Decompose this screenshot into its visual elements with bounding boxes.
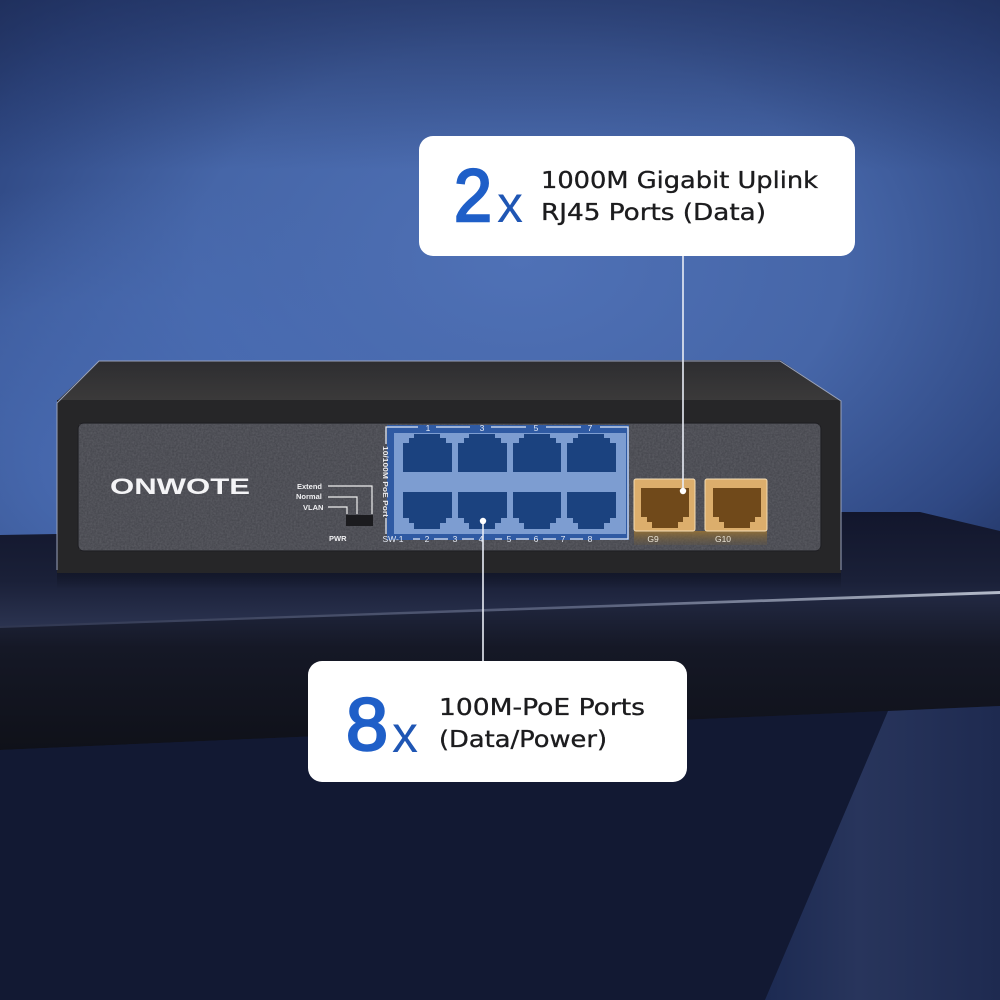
port numbers: 7 [561, 534, 566, 544]
port numbers: 7 [588, 423, 593, 433]
description: 100M-PoE Ports [439, 695, 645, 721]
leader line [682, 256, 684, 491]
DIP switch [346, 515, 373, 526]
port G9 [634, 479, 695, 531]
frame lines [386, 427, 628, 539]
shelf top surface [0, 512, 1000, 627]
light beam on lower wall [765, 706, 1000, 1000]
switch top face [57, 360, 841, 401]
port numbers: 4 [479, 534, 484, 544]
front panel plate [78, 423, 821, 551]
brand logo: ONWOTE [110, 474, 250, 499]
vertical port label: 10/100M PoE Port [381, 446, 390, 518]
callout: uplink ports: RJ45 Ports (Data) [541, 200, 766, 226]
card [308, 661, 687, 782]
top row ports [403, 434, 616, 472]
DIP switch labels: Extend [297, 482, 322, 491]
leader line [482, 521, 484, 661]
DIP switch labels: PWR [329, 534, 347, 543]
leader dot [480, 518, 486, 524]
port numbers: 2 [425, 534, 430, 544]
port numbers: 3 [453, 534, 458, 544]
callout: uplink ports [419, 136, 855, 494]
callout: PoE ports [308, 518, 687, 782]
gigabit uplink ports [634, 479, 767, 545]
DIP switch labels: Normal [296, 492, 322, 501]
background wall [0, 0, 1000, 560]
shelf highlight edge [0, 591, 1000, 628]
multiplier: x [392, 706, 418, 764]
uplink labels: G9 [647, 534, 659, 544]
leader dot [680, 488, 686, 494]
shelf underside [0, 706, 1000, 1000]
blue highlight frame [387, 425, 629, 540]
port numbers: 1 [426, 423, 431, 433]
port numbers: 6 [534, 534, 539, 544]
multiplier: x [497, 176, 523, 234]
network switch [57, 360, 841, 573]
port numbers: 5 [507, 534, 512, 544]
switch shadow [57, 573, 841, 589]
port numbers: SW-1 [382, 534, 404, 544]
uplink labels [647, 534, 731, 544]
uplink labels: G10 [715, 534, 731, 544]
DIP switch labels: VLAN [303, 503, 323, 512]
port numbers: 8 [588, 534, 593, 544]
port G10 [705, 479, 767, 531]
shelf front face [0, 593, 1000, 750]
bottom row ports [403, 492, 616, 529]
DIP switch leader lines [328, 486, 372, 514]
DIP switch labels [296, 482, 347, 543]
count: 2 [454, 154, 492, 237]
switch front face [57, 400, 841, 573]
port numbers: 3 [480, 423, 485, 433]
card [419, 136, 855, 256]
count: 8 [346, 683, 388, 766]
PoE port block [381, 423, 629, 544]
switch edge highlights [57, 361, 841, 570]
description: 1000M Gigabit Uplink [541, 168, 819, 194]
callout: PoE ports: (Data/Power) [439, 727, 607, 753]
shelf [0, 512, 1000, 1000]
amber glow [634, 531, 767, 545]
port numbers: 5 [534, 423, 539, 433]
light blue port surround [394, 433, 626, 534]
port numbers [382, 423, 593, 544]
